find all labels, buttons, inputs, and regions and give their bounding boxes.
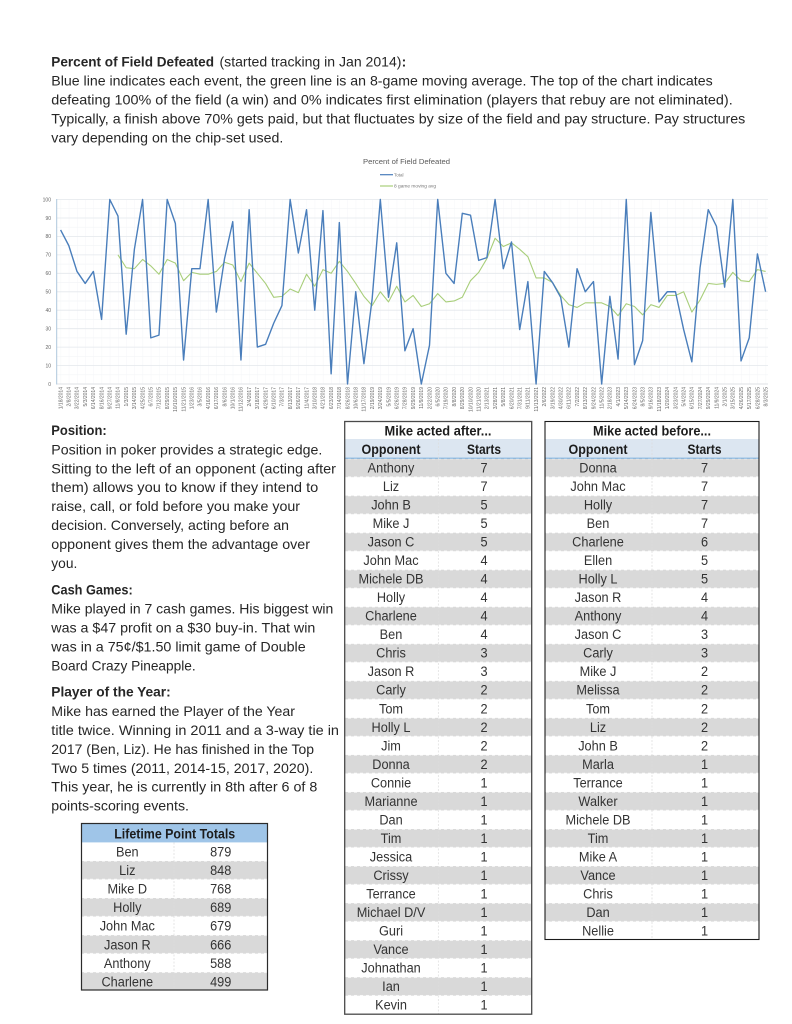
text block: player of the year (51, 684, 339, 814)
x axis date labels: 6/7/2015 (148, 387, 154, 406)
opponent column: Mike J (580, 664, 616, 679)
opponent column: Michele DB (565, 812, 631, 828)
x axis date labels: 8/29/2015 (165, 387, 171, 409)
x axis date labels: 11/21/2015 (181, 387, 187, 412)
opponent column: Tom (379, 701, 403, 716)
line chart: percent of field defeated (43, 157, 770, 412)
names column: Liz (119, 862, 136, 878)
text block: player of the year: Two 5 times (2011, 2014-15, 2017, 2020). (51, 760, 313, 776)
starts column: 2 (701, 738, 708, 753)
names column: Jason R (104, 937, 151, 952)
opponent column: Holly (584, 497, 612, 513)
x axis date labels: 11/8/2014 (116, 387, 122, 409)
starts column: 5 (480, 516, 488, 531)
starts column: 4 (480, 608, 488, 624)
x axis date labels: 3/23/2024 (673, 387, 679, 409)
table header: lifetime point totals: Lifetime Point Totals (114, 825, 235, 841)
opponent column: Anthony (575, 608, 622, 624)
starts column (701, 460, 709, 939)
starts column: 1 (480, 830, 488, 846)
intro text block: vary depending on the chip-set used. (51, 130, 283, 146)
table: lifetime point totals (82, 824, 268, 990)
opponent column: Terrance (366, 886, 416, 902)
starts column: 1 (701, 886, 708, 902)
x axis date labels: 6/26/2019 (394, 387, 400, 409)
table header row: Starts (467, 441, 501, 457)
starts column: 5 (480, 534, 488, 550)
opponent column: Connie (371, 775, 411, 790)
intro text block: Blue line indicates each event, the green line is an 8-game moving average. The top of the chart indicates (51, 73, 713, 89)
starts column: 4 (701, 608, 709, 624)
y axis labels: 30 (45, 326, 51, 332)
x axis date labels: 7/31/2021 (517, 387, 523, 409)
opponent column: Michele DB (358, 571, 424, 587)
text block: cash games: Board Crazy Pineapple. (51, 658, 196, 674)
opponent column: John B (371, 497, 411, 513)
x axis date labels: 1/3/2015 (124, 387, 130, 406)
text block: position: raise, call, or fold before you make your (51, 498, 300, 514)
opponent column: Ian (382, 979, 400, 994)
x axis date labels: 7/2/2022 (575, 387, 581, 406)
heading: player of the year: Player of the Year: (51, 684, 171, 700)
names column: Ben (116, 844, 139, 860)
x axis date labels: 6/17/2016 (214, 387, 220, 409)
x axis date labels: 4/1/2023 (616, 387, 622, 406)
points column: 848 (210, 862, 231, 878)
x axis date labels: 7/28/2019 (403, 387, 409, 409)
x axis date labels: 2/13/2021 (485, 387, 491, 409)
starts column: 1 (480, 941, 488, 957)
chart legend: Total (394, 172, 404, 177)
x axis date labels: 5/17/2025 (747, 387, 753, 409)
starts column: 2 (701, 664, 708, 679)
starts column: 1 (480, 960, 488, 976)
opponent column: Terrance (573, 775, 623, 790)
opponent column: John Mac (363, 553, 419, 568)
x axis date labels: 11/12/2016 (239, 387, 245, 412)
points column (210, 844, 231, 990)
chart legend (380, 172, 437, 189)
opponent column: Dan (379, 812, 403, 828)
x axis date labels: 9/29/2019 (411, 387, 417, 409)
x axis date labels: 4/25/2015 (140, 387, 146, 409)
table header row: Starts (688, 441, 722, 457)
y axis labels: 20 (45, 345, 51, 351)
x axis date labels: 3/10/2018 (312, 387, 318, 409)
starts column: 7 (480, 460, 488, 476)
starts column: 7 (701, 516, 708, 531)
text block: player of the year: 2017 (Ben, Liz). He has finished in the Top (51, 741, 314, 757)
opponent column: Jason C (575, 627, 622, 642)
x axis date labels: 8/29/2020 (460, 387, 466, 409)
text block: cash games: was a $47 profit on a $30 buy-in. That win (50, 620, 315, 636)
x axis date labels: 11/18/2023 (657, 387, 663, 412)
opponent column: Nellie (582, 923, 614, 939)
starts column: 2 (480, 738, 488, 753)
starts column: 4 (480, 553, 488, 568)
starts column: 1 (480, 979, 488, 994)
opponent column: Mike J (373, 516, 409, 531)
starts column: 1 (701, 904, 708, 920)
opponent column: Walker (578, 793, 618, 809)
starts column: 7 (701, 478, 708, 494)
opponent column (565, 460, 631, 939)
starts column: 1 (480, 904, 488, 920)
text block: position (51, 422, 336, 571)
x axis date labels: 11/9/2024 (714, 387, 720, 409)
x axis date labels: 6/15/2024 (690, 387, 696, 409)
starts column: 4 (480, 627, 488, 642)
intro text block (51, 54, 745, 146)
opponent column: Jessica (370, 849, 413, 865)
opponent column: Anthony (368, 460, 415, 476)
opponent column: Tim (588, 830, 608, 846)
x axis date labels: 2/1/2025 (723, 387, 729, 406)
opponent column: Marla (582, 756, 614, 772)
opponent column: Carly (583, 645, 613, 661)
starts column: 1 (480, 923, 488, 939)
text block: cash games: Mike played in 7 cash games. His biggest win (51, 601, 333, 617)
x axis date labels: 9/29/2024 (706, 387, 712, 409)
starts column: 1 (701, 923, 708, 939)
opponent column: Donna (579, 460, 617, 476)
opponent column: Kevin (375, 997, 407, 1013)
starts column: 2 (701, 719, 708, 735)
x axis date labels: 2/22/2020 (427, 387, 433, 409)
starts column: 1 (480, 775, 488, 790)
x axis date labels: 6/11/2022 (567, 387, 573, 409)
x axis date labels: 3/19/2022 (550, 387, 556, 409)
starts column: 4 (480, 590, 488, 605)
x axis date labels: 8/6/2016 (222, 387, 228, 406)
starts column: 2 (480, 682, 488, 698)
intro text block: defeating 100% of the field (a win) and 0% indicates first elimination (players that rebuy are not eliminated). (51, 92, 733, 108)
chart title: Percent of Field Defeated (363, 157, 450, 166)
names column: Charlene (101, 974, 153, 990)
x axis date labels: 3/5/2016 (198, 387, 204, 406)
x axis date labels: 9/26/2017 (296, 387, 302, 409)
x axis date labels: 9/11/2021 (526, 387, 532, 409)
x axis date labels: 11/4/2017 (304, 387, 310, 409)
x axis date labels: 5/3/2014 (83, 387, 89, 406)
opponent column: John B (578, 738, 618, 753)
blue line: each event (61, 200, 766, 384)
opponent column: Carly (376, 682, 406, 698)
x axis date labels: 1/20/2024 (665, 387, 671, 409)
opponent column: Liz (383, 478, 399, 494)
opponent column: Jason C (368, 534, 415, 550)
intro heading: (started tracking in Jan 2014) (220, 54, 402, 70)
text block: position: opponent gives them the advantage over (51, 536, 310, 552)
y axis labels: 100 (43, 197, 51, 203)
y axis labels: 10 (45, 363, 51, 369)
text block: player of the year: title twice. Winning in 2011 and a 3-way tie in (51, 722, 339, 738)
intro heading (51, 54, 406, 70)
opponent column: Tom (586, 701, 610, 716)
opponent column: Marianne (364, 793, 418, 809)
x axis date labels: 4/26/2025 (739, 387, 745, 409)
opponent column: Holly L (579, 571, 617, 587)
points column: 499 (210, 974, 231, 990)
starts column: 1 (701, 793, 708, 809)
x axis date labels: 8/3/2025 (764, 387, 770, 406)
x axis date labels: 5/4/2024 (682, 387, 688, 406)
x axis date labels: 3/18/2017 (255, 387, 261, 409)
x axis date labels: 5/14/2023 (624, 387, 630, 409)
x axis date labels: 5/8/2021 (501, 387, 507, 406)
x axis date labels: 6/23/2018 (329, 387, 335, 409)
y axis labels: 0 (48, 382, 51, 388)
starts column: 1 (701, 830, 708, 846)
starts column: 6 (701, 534, 708, 550)
table: mike acted before (545, 422, 759, 940)
opponent column: Liz (590, 719, 606, 735)
opponent column: Tim (381, 830, 401, 846)
text block: position: them) allows you to know if they intend to (51, 479, 319, 495)
names column: Mike D (107, 881, 147, 897)
starts column: 1 (701, 756, 708, 772)
x axis date labels: 8/26/2018 (345, 387, 351, 409)
x axis date labels: 10/10/2020 (468, 387, 474, 412)
points column: 588 (210, 955, 231, 971)
names column (100, 844, 155, 990)
opponent column: Ben (380, 627, 402, 642)
x axis date labels: 6/10/2017 (271, 387, 277, 409)
starts column: 3 (480, 645, 488, 661)
opponent column: Jason R (575, 590, 622, 605)
starts column: 1 (701, 775, 708, 790)
x axis date labels: 8/8/2020 (452, 387, 458, 406)
x axis date labels: 3/14/2015 (132, 387, 138, 409)
x axis date labels: 3/22/2014 (75, 387, 81, 409)
points column: 689 (210, 900, 231, 915)
points column: 679 (210, 918, 231, 934)
green line: 8-game moving average (118, 238, 766, 316)
text block: player of the year: This year, he is currently in 8th after 6 of 8 (51, 779, 318, 795)
starts column: 1 (701, 812, 708, 828)
starts column: 1 (480, 867, 488, 883)
opponent column: Holly (377, 590, 405, 605)
x axis date labels: 3/15/2025 (731, 387, 737, 409)
x axis date labels: 6/14/2014 (91, 387, 97, 409)
starts column: 1 (480, 849, 488, 865)
text block: player of the year: points-scoring events. (51, 798, 189, 814)
names column: Anthony (104, 955, 151, 971)
y axis labels: 60 (45, 271, 51, 277)
x axis date labels: 11/21/2020 (476, 387, 482, 412)
names column: Holly (113, 900, 142, 915)
x axis date labels: 1/23/2016 (189, 387, 195, 409)
starts column: 3 (701, 645, 708, 661)
opponent column: Johnathan (361, 960, 421, 976)
starts column: 5 (701, 553, 708, 568)
y axis labels: 50 (45, 290, 51, 296)
points column: 768 (210, 881, 231, 897)
points column: 879 (210, 844, 231, 860)
table title: mike acted after: Mike acted after... (384, 423, 492, 439)
x axis date labels: 10/10/2015 (173, 387, 179, 412)
intro text block: Typically, a finish above 70% gets paid, but that fluctuates by size of the field and pay structure. Pay structures (51, 111, 745, 127)
starts column: 3 (480, 664, 488, 679)
x axis date labels: 10/6/2018 (353, 387, 359, 409)
starts column: 1 (480, 793, 488, 809)
x axis date labels: 6/24/2023 (632, 387, 638, 409)
x axis date labels (58, 387, 770, 412)
intro heading: Percent of Field Defeated (51, 54, 214, 70)
x axis date labels: 4/30/2022 (558, 387, 564, 409)
starts column: 7 (701, 460, 708, 476)
opponent column: Jim (381, 738, 401, 753)
text block: position: Position in poker provides a strategic edge. (51, 441, 322, 457)
intro heading: : (402, 54, 406, 70)
opponent column: Vance (580, 867, 616, 883)
x axis date labels: 8/13/2022 (583, 387, 589, 409)
starts column: 3 (701, 627, 708, 642)
starts column: 7 (701, 497, 708, 513)
starts column: 1 (701, 867, 708, 883)
starts column (480, 460, 488, 1013)
x axis date labels: 8/13/2017 (288, 387, 294, 409)
starts column: 2 (701, 701, 708, 716)
y axis labels: 40 (45, 308, 51, 314)
x axis date labels: 3/28/2021 (493, 387, 499, 409)
text block: player of the year: Mike has earned the Player of the Year (51, 703, 295, 719)
x axis date labels: 11/13/2021 (534, 387, 540, 412)
table header row (546, 439, 758, 458)
opponent column: Dan (586, 904, 610, 920)
opponent column: Mike A (579, 849, 617, 865)
opponent column: John Mac (570, 478, 626, 494)
x axis date labels: 9/24/2022 (591, 387, 597, 409)
opponent column: Donna (372, 756, 410, 772)
y axis labels: 80 (45, 234, 51, 240)
starts column: 1 (480, 997, 488, 1013)
x axis date labels: 2/4/2017 (247, 387, 253, 406)
opponent column (357, 460, 425, 1013)
opponent column: Vance (373, 941, 409, 957)
x axis date labels: 7/27/2024 (698, 387, 704, 409)
x axis date labels: 11/17/2018 (362, 387, 368, 412)
x axis date labels: 2/18/2023 (608, 387, 614, 409)
starts column: 1 (701, 849, 708, 865)
text block: position: Sitting to the left of an opponent (acting after (51, 460, 336, 476)
heading: position: Position: (51, 422, 107, 438)
starts column: 2 (480, 719, 488, 735)
starts column: 7 (480, 478, 488, 494)
x axis date labels: 3/24/2019 (378, 387, 384, 409)
opponent column: Holly L (372, 719, 410, 735)
x axis date labels: 9/16/2023 (649, 387, 655, 409)
x axis date labels: 10/1/2016 (230, 387, 236, 409)
heading: cash games: Cash Games: (51, 581, 133, 597)
names column: John Mac (100, 918, 155, 934)
opponent column: Ellen (584, 553, 612, 568)
opponent column: Crissy (373, 867, 409, 883)
x axis date labels: 9/27/2014 (108, 387, 114, 409)
y axis labels (43, 197, 51, 388)
x axis date labels: 7/19/2020 (444, 387, 450, 409)
opponent column: Chris (583, 886, 613, 902)
opponent column: Charlene (572, 534, 624, 550)
x axis date labels: 7/3/2017 (280, 387, 286, 406)
opponent column: Guri (379, 923, 403, 939)
table header row: Opponent (362, 441, 421, 457)
starts column: 1 (480, 886, 488, 902)
table header row (345, 439, 532, 458)
opponent column: Michael D/V (357, 904, 425, 920)
x axis date labels: 4/21/2018 (321, 387, 327, 409)
table title: mike acted before: Mike acted before... (593, 423, 711, 439)
y axis labels: 70 (45, 253, 51, 259)
opponent column: Charlene (365, 608, 417, 624)
x axis date labels: 8/16/2014 (99, 387, 105, 409)
y axis labels: 90 (45, 216, 51, 222)
x axis date labels: 2/19/2019 (370, 387, 376, 409)
text block: position: decision. Conversely, acting before an (51, 517, 289, 533)
table header: lifetime point totals (82, 824, 268, 842)
x axis date labels: 4/16/2016 (206, 387, 212, 409)
x axis date labels: 6/5/2020 (435, 387, 441, 406)
x axis date labels: 7/14/2018 (337, 387, 343, 409)
starts column: 4 (701, 590, 709, 605)
x axis date labels: 8/5/2023 (641, 387, 647, 406)
x axis date labels: 2/6/2022 (542, 387, 548, 406)
x axis date labels: 11/9/2019 (419, 387, 425, 409)
points column: 666 (210, 937, 231, 952)
opponent column: Jason R (368, 664, 415, 679)
text block: cash games (50, 581, 333, 674)
x axis date labels: 6/28/2025 (755, 387, 761, 409)
text block: position: you. (51, 555, 77, 571)
starts column: 2 (480, 701, 488, 716)
text block: cash games: was in a 75¢/$1.50 limit game of Double (50, 639, 306, 655)
table: mike acted after (345, 422, 532, 1014)
starts column: 4 (480, 571, 488, 587)
opponent column: Melissa (576, 682, 620, 698)
x axis date labels: 4/29/2017 (263, 387, 269, 409)
x axis date labels: 11/5/2022 (600, 387, 606, 409)
table header row: Opponent (568, 441, 628, 457)
opponent column: Ben (587, 516, 609, 531)
starts column: 5 (701, 571, 708, 587)
x axis date labels: 6/20/2021 (509, 387, 515, 409)
x axis date labels: 2/8/2014 (66, 387, 72, 406)
x axis date labels: 5/5/2019 (386, 387, 392, 406)
x axis date labels: 1/18/2014 (58, 387, 64, 409)
starts column: 2 (480, 756, 488, 772)
opponent column: Chris (376, 645, 406, 661)
starts column: 2 (701, 682, 708, 698)
x axis date labels: 7/12/2015 (157, 387, 163, 409)
starts column: 1 (480, 812, 488, 828)
chart legend: 8 game moving avg (394, 184, 437, 189)
starts column: 5 (480, 497, 488, 513)
